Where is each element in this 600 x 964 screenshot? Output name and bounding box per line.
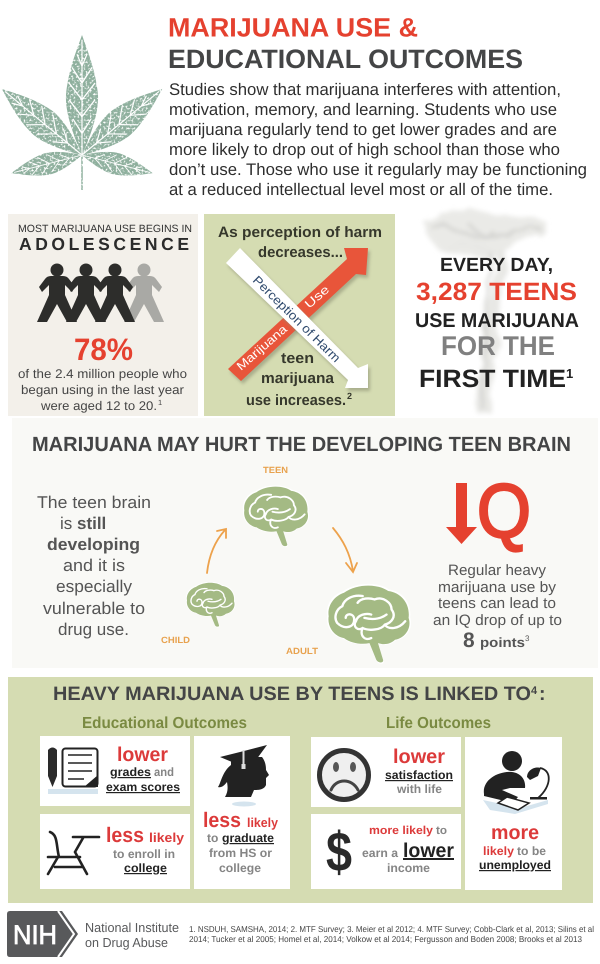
text: less likely to enroll: to enroll in: [113, 847, 175, 861]
panel bottom text: 2: [347, 391, 352, 401]
title: MARIJUANA USE &: [168, 12, 418, 42]
logo: NIH: NIH: [13, 920, 57, 950]
text: lower satisfaction: satisfaction: [385, 768, 453, 782]
text: less likely to graduate: from HS or: [209, 846, 272, 860]
title: [168, 12, 523, 74]
intro text block: more likely to drop out of high school than those who: [169, 140, 560, 159]
card: lower grades: [40, 736, 190, 806]
icon: paper doll chain: [37, 264, 164, 322]
statistic: 78%: 78%: [74, 332, 133, 367]
text: lower grades: lower: [117, 744, 168, 766]
statistic text: FIRST TIME: [419, 365, 566, 393]
panel top text: decreases...: [258, 244, 343, 261]
text: lower income: [362, 825, 454, 875]
arrow: marijuana use rising: Use: [302, 282, 332, 311]
label: teen: TEEN: [263, 465, 288, 475]
text: more likely unemployed: likely: [483, 844, 514, 858]
text: brain still developing: drug use.: [58, 620, 129, 639]
text: less likely to graduate: less: [203, 809, 241, 832]
text: lower income: income: [387, 861, 430, 875]
panel heading: :: [539, 683, 546, 705]
panel: every day statistic: [415, 212, 579, 414]
text: more likely unemployed: unemployed: [479, 858, 551, 872]
references: 2014; Tucker et al 2005; Homel et al, 2014; Volkow et al 2014; Fergusson and Boden 2008; Brooks et al 2013: [189, 934, 582, 944]
arrow: marijuana use rising: [228, 248, 370, 384]
footer: NIH logo and references: [7, 911, 594, 957]
label: child: CHILD: [161, 635, 191, 645]
card: less likely to enroll: [40, 814, 190, 889]
text: more likely unemployed: [479, 822, 551, 872]
text: lower grades: grades: [110, 765, 151, 779]
panel heading: HEAVY MARIJUANA USE BY TEENS IS LINKED TO: [53, 683, 531, 705]
text: lower income: lower: [403, 840, 454, 862]
header: leaf, title and intro: [0, 12, 587, 199]
arrow: child to teen: [207, 529, 226, 573]
panel heading: ADOLESCENCE: [19, 234, 189, 254]
statistic text: EVERY DAY,: [440, 255, 553, 276]
text: less likely to graduate: college: [219, 861, 261, 875]
text: brain still developing: especially: [56, 577, 133, 596]
smoke background: [424, 212, 548, 414]
statistic text: 1: [566, 366, 573, 381]
text: brain still developing: The teen brain: [37, 493, 151, 512]
references: [189, 924, 594, 944]
text: brain still developing: and it is: [63, 556, 125, 575]
statistic description: of the 2.4 million people who: [18, 367, 187, 381]
text: IQ drop: teens can lead to: [438, 595, 556, 612]
statistic description: were aged 12 to 20.: [40, 399, 157, 413]
icon: graduate silhouette: [218, 745, 269, 806]
statistic text: FOR THE: [441, 331, 555, 361]
panel: adolescence: [8, 214, 198, 416]
panel top text: [218, 224, 382, 261]
icon: school desk: [48, 832, 99, 874]
arrow: teen to adult: [333, 528, 357, 572]
text: lower grades: and: [154, 765, 174, 779]
text: lower income: earn a: [362, 846, 398, 860]
card: more likely unemployed: [465, 737, 562, 890]
panel bottom text: teen: [281, 350, 314, 367]
text: IQ drop: marijuana use by: [438, 579, 557, 596]
text: more likely unemployed: more: [491, 822, 539, 844]
panel top text: As perception of harm: [218, 224, 382, 241]
intro text block: at a reduced intellectual level most or all of the time.: [169, 180, 553, 199]
icon: dollar sign: $: [326, 820, 352, 883]
intro text block: Studies show that marijuana interferes with attention,: [169, 80, 561, 99]
text: IQ drop: [433, 562, 562, 652]
title: EDUCATIONAL OUTCOMES: [168, 44, 523, 74]
card: lower satisfaction: [311, 737, 461, 807]
text: brain still developing: [37, 493, 151, 639]
icon: teen brain: [243, 485, 309, 547]
icon: adult brain: [327, 584, 411, 664]
text: lower grades: exam scores: [106, 780, 180, 794]
intro text block: don’t use. Those who use it regularly may be functioning: [169, 160, 587, 179]
text: IQ drop: 8: [463, 629, 475, 652]
panel heading: [18, 223, 192, 254]
statistic text: [415, 255, 579, 393]
arrow: perception of harm falling: [226, 248, 370, 391]
statistic text: 3,287 TEENS: [416, 278, 577, 306]
panel: perception of harm: [204, 214, 395, 416]
icon: child brain: [186, 582, 235, 627]
text: brain still developing: developing: [47, 535, 140, 554]
intro text block: marijuana regularly tend to get lower grades and are: [169, 120, 557, 139]
statistic description: [18, 367, 187, 413]
column heading: life outcomes: Life Outcomes: [386, 715, 491, 732]
arrow: marijuana use rising: Marijuana: [234, 322, 290, 373]
text: less likely to graduate: [203, 809, 279, 875]
text: IQ drop: Regular heavy: [448, 562, 546, 579]
panel heading: MOST MARIJUANA USE BEGINS IN: [18, 223, 192, 235]
text: lower grades: [106, 744, 180, 794]
icon: IQ drop: [446, 469, 531, 554]
panel: heavy use outcomes: [8, 677, 593, 903]
text: more likely unemployed: to be: [517, 844, 546, 858]
text: less likely to enroll: college: [124, 861, 167, 875]
text: less likely to graduate: likely: [247, 815, 279, 830]
diagram: brain growth cycle: [161, 465, 411, 664]
panel: teen brain: [12, 418, 598, 668]
icon: IQ drop: Q: [477, 469, 531, 554]
icon: person at desk with lamp: [483, 751, 549, 814]
text: lower satisfaction: [385, 746, 453, 796]
panel bottom text: use increases.: [246, 392, 346, 409]
text: IQ drop: points: [480, 635, 525, 650]
panel heading: MARIJUANA MAY HURT THE DEVELOPING TEEN BRAIN: [32, 433, 571, 456]
intro text block: [169, 80, 587, 199]
icon: pencil and paper: [48, 748, 98, 794]
statistic text: USE MARIJUANA: [415, 310, 579, 332]
intro text block: motivation, memory, and learning. Students who use: [169, 100, 557, 119]
card: less likely to graduate: [194, 736, 290, 889]
text: lower income: to: [436, 825, 447, 837]
text: less likely to graduate: to: [207, 831, 218, 845]
text: lower satisfaction: lower: [393, 746, 445, 768]
text: IQ drop: an IQ drop of up to: [433, 612, 562, 629]
text: IQ drop: 3: [525, 634, 530, 643]
panel bottom text: marijuana: [261, 370, 335, 387]
panel bottom text: [246, 350, 352, 409]
icon: cannabis leaf: [0, 35, 172, 190]
column heading: educational outcomes: Educational Outcomes: [82, 715, 247, 732]
panel heading: 4: [531, 685, 538, 697]
text: less likely to enroll: less: [106, 824, 144, 847]
text: less likely to enroll: [106, 824, 185, 875]
statistic description: began using in the last year: [21, 383, 184, 397]
text: less likely to enroll: likely: [149, 830, 185, 845]
statistic description: 1: [158, 398, 162, 407]
card: lower income: [311, 814, 461, 889]
icon: sad face: [320, 750, 368, 800]
text: lower satisfaction: with life: [396, 782, 442, 796]
text: brain still developing: vulnerable to: [43, 599, 145, 618]
arrow: perception of harm falling: Perception of Harm: [250, 273, 343, 365]
text: less likely to graduate: graduate: [222, 831, 274, 845]
label: adult: ADULT: [286, 646, 319, 656]
logo: NIH: [7, 911, 78, 957]
organisation name: National Institute: [85, 920, 179, 935]
organisation name: on Drug Abuse: [85, 935, 168, 950]
text: lower income: more likely: [369, 825, 434, 837]
organisation name: [85, 920, 179, 950]
text: brain still developing: is still: [60, 514, 106, 533]
